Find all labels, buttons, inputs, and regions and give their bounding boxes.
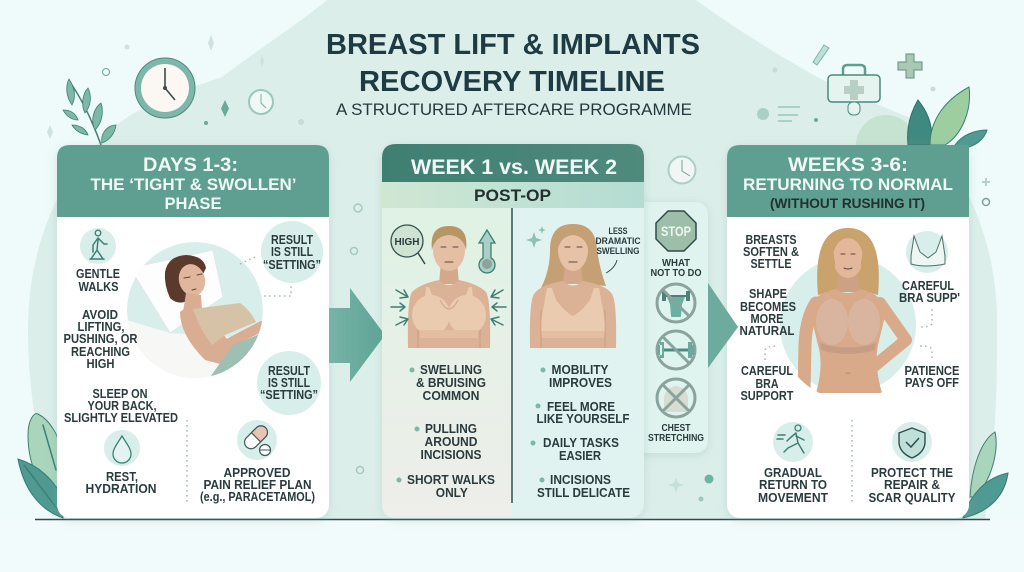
list: week 1 symptoms: SWELLING [420, 363, 482, 377]
header: week 1 vs week 2: WEEK 1 vs. WEEK 2 [411, 156, 617, 179]
icon: gentle walk [80, 228, 116, 264]
panel: days 1-3 [57, 145, 329, 518]
callout: less dramatic swelling: SWELLING [596, 246, 640, 256]
header: days 1-3: THE ‘TIGHT & SWOLLEN’ [90, 175, 296, 194]
list: week 2 progress: LIKE YOURSELF [536, 412, 630, 426]
text: gentle walks: GENTLE [76, 267, 120, 281]
arrow: week 2 to weeks 3-6 [708, 283, 738, 368]
photo: week 1 woman [408, 226, 490, 348]
text: careful bra support left: CAREFUL [741, 364, 793, 378]
text: breasts soften: BREASTS [746, 233, 796, 247]
text: rest, hydration: HYDRATION [86, 482, 156, 496]
arrow: days to weeks [325, 288, 385, 382]
text: careful bra support left: SUPPORT [740, 389, 794, 403]
text: shape becomes natural [740, 287, 796, 338]
text: shape becomes natural: MORE [750, 312, 784, 326]
icon: pills [237, 420, 277, 460]
text: avoid lifting: AVOID [82, 308, 118, 322]
icon: small clock [249, 90, 273, 114]
icon: shield [892, 422, 932, 462]
title: RECOVERY TIMELINE [359, 66, 665, 98]
list: week 2 progress: MOBILITY [552, 363, 609, 377]
photo: recovered woman [780, 228, 916, 393]
text: avoid lifting: PUSHING, OR [64, 332, 138, 346]
header: week 1 vs week 2 [382, 144, 644, 182]
text: protect the repair: PROTECT THE [871, 466, 953, 480]
text: chest stretching: CHEST [662, 423, 690, 434]
text: careful bra support right [899, 279, 960, 305]
text: shape becomes natural: SHAPE [749, 287, 787, 301]
list: week 2 progress: STILL DELICATE [537, 486, 630, 500]
icon: medical kit [828, 65, 880, 115]
list: week 1 symptoms: PULLING [425, 422, 477, 436]
list: week 1 symptoms: INCISIONS [420, 448, 482, 462]
list: week 1 symptoms: AROUND [424, 435, 478, 449]
text: protect the repair: REPAIR & [884, 478, 940, 492]
list: week 1 symptoms: COMMON [422, 389, 480, 403]
callout: result is still setting (bottom): RESULT [268, 364, 310, 378]
text: avoid lifting: LIFTING, [78, 320, 124, 334]
icon: no overhead lifting [657, 284, 695, 322]
callout: less dramatic swelling [596, 226, 641, 273]
header: weeks 3-6: RETURNING TO NORMAL [743, 175, 953, 194]
text: patience pays off [904, 364, 960, 390]
header: weeks 3-6: WEEKS 3-6: [788, 155, 908, 176]
subtitle: A STRUCTURED AFTERCARE PROGRAMME [336, 100, 692, 119]
text: sleep on your back: YOUR BACK, [88, 399, 156, 413]
text: gentle walks: WALKS [78, 280, 118, 294]
text: careful bra support right: BRA SUPP' [899, 291, 960, 305]
title [326, 29, 700, 98]
photo: week 2 woman [530, 224, 616, 348]
text: chest stretching: STRETCHING [648, 433, 704, 444]
text: protect the repair [868, 466, 956, 505]
callout: result is still setting (top): RESULT [271, 233, 313, 247]
list: week 1 symptoms: & BRUISING [416, 376, 486, 390]
callout: result is still setting (top): “SETTING” [263, 258, 321, 272]
icon: plus [898, 54, 922, 78]
text: gradual return: MOVEMENT [758, 491, 828, 505]
icon: sparkles left [47, 35, 936, 139]
list: week 1 symptoms [396, 363, 495, 500]
text: shape becomes natural: BECOMES [740, 300, 796, 314]
text: breasts soften: SOFTEN & [743, 245, 799, 259]
list: week 2 progress [530, 363, 630, 500]
text: pain relief plan: (e.g., PARACETAMOL) [200, 490, 315, 504]
text: avoid lifting: HIGH [86, 357, 114, 371]
callout: less dramatic swelling: LESS [608, 226, 628, 236]
decorative marks right edge [982, 178, 990, 206]
callout: result is still setting (top) [261, 221, 323, 283]
header: weeks 3-6 [727, 145, 969, 217]
text: sleep on your back [64, 387, 178, 425]
text: rest, hydration [86, 470, 156, 496]
icon: high magnifier [391, 225, 425, 264]
text: pain relief plan: PAIN RELIEF PLAN [204, 478, 312, 492]
text: rest, hydration: REST, [106, 470, 138, 484]
text: sleep on your back: SLEEP ON [92, 387, 148, 401]
icon: clock above stop panel [668, 156, 696, 184]
text: shape becomes natural: NATURAL [740, 324, 795, 338]
header: days 1-3: PHASE [164, 194, 222, 213]
icon: stop sign [656, 211, 696, 251]
header: days 1-3: DAYS 1-3: [143, 155, 238, 176]
decorative leaves: top right [908, 87, 987, 148]
icon: running figure [773, 422, 813, 462]
text: gradual return: GRADUAL [764, 466, 822, 480]
panel: weeks 3-6 [727, 145, 969, 518]
list: week 1 symptoms: SHORT WALKS [407, 473, 495, 487]
header: weeks 3-6: (WITHOUT RUSHING IT) [770, 195, 925, 211]
decorative leaves: bottom left [18, 414, 63, 518]
icon: sparkles [526, 226, 546, 248]
text: what not to do [650, 258, 702, 279]
list: week 2 progress: EASIER [559, 449, 601, 463]
text: breasts soften [743, 233, 799, 271]
callout: result is still setting (bottom): “SETTING” [260, 388, 318, 402]
week 1 column background [382, 208, 512, 518]
text: avoid lifting: REACHING [71, 345, 130, 359]
icon: pencil [813, 45, 829, 65]
text: sleep on your back: SLIGHTLY ELEVATED [64, 411, 178, 425]
icon: high magnifier: HIGH [394, 237, 420, 248]
decorative dots right of week 2 [350, 204, 714, 502]
icon: bra [906, 231, 948, 273]
list: week 2 progress: INCISIONS [550, 473, 611, 487]
callout: result is still setting (top): IS STILL [271, 245, 313, 259]
text: pain relief plan: APPROVED [224, 466, 290, 480]
band: post-op: POST-OP [474, 186, 551, 205]
photo: woman resting [127, 242, 263, 378]
icon: small list [757, 106, 800, 122]
icon: no dumbbell [657, 331, 695, 369]
text: breasts soften: SETTLE [750, 257, 792, 271]
panel: what not to do [630, 202, 708, 453]
list: week 2 progress: IMPROVES [549, 376, 612, 390]
text: careful bra support right: CAREFUL [902, 279, 954, 293]
callout: result is still setting (bottom): IS STILL [268, 376, 310, 390]
title: BREAST LIFT & IMPLANTS [326, 29, 700, 61]
band: post-op [382, 182, 644, 208]
icon: wall clock [135, 58, 195, 118]
icon: compression arrows [391, 290, 506, 325]
icon: water drop [104, 430, 140, 466]
text: careful bra support left: BRA [756, 377, 778, 391]
text: careful bra support left [740, 364, 794, 403]
list: week 1 symptoms: ONLY [436, 486, 468, 500]
icon: no chest stretching [657, 379, 695, 417]
icon: stop sign: STOP [661, 223, 691, 239]
text: chest stretching [648, 423, 704, 444]
decorative sprig: top left [63, 79, 116, 145]
text: what not to do: NOT TO DO [650, 268, 702, 279]
text: patience pays off: PAYS OFF [905, 376, 959, 390]
text: patience pays off: PATIENCE [904, 364, 960, 378]
text: gradual return: RETURN TO [759, 478, 827, 492]
text: what not to do: WHAT [662, 258, 690, 269]
text: pain relief plan [200, 466, 315, 504]
text: gradual return [758, 466, 828, 505]
text: gentle walks [76, 267, 120, 294]
list: week 2 progress: FEEL MORE [547, 400, 615, 414]
callout: less dramatic swelling: DRAMATIC [596, 236, 641, 246]
icon: thermometer arrow [479, 230, 495, 273]
list: week 2 progress: DAILY TASKS [543, 436, 619, 450]
callout: result is still setting (bottom) [257, 351, 321, 415]
text: avoid lifting [64, 308, 138, 371]
header: days 1-3 [57, 145, 329, 217]
panel: week 1 vs week 2 [382, 144, 644, 518]
text: protect the repair: SCAR QUALITY [868, 491, 956, 505]
decorative leaves: bottom right [963, 432, 1008, 518]
